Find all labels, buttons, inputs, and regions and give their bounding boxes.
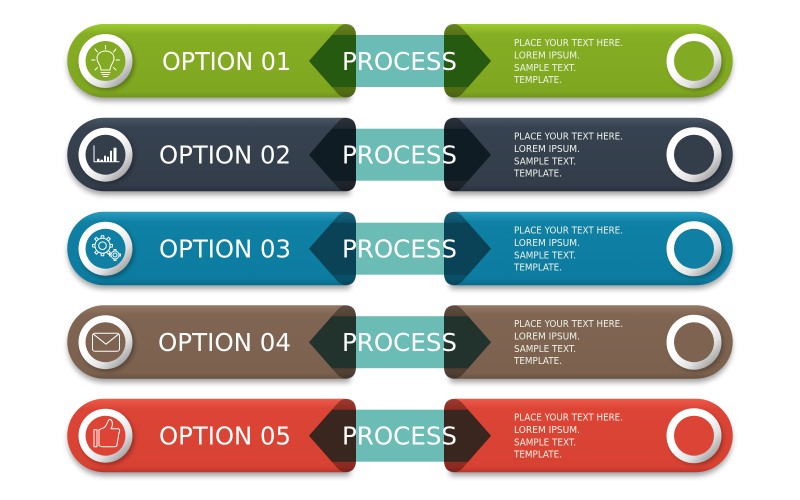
left ring	[78, 409, 134, 465]
description text	[513, 38, 623, 86]
left panel	[67, 399, 356, 472]
description text: TEMPLATE.	[513, 356, 562, 367]
option row 2	[67, 118, 733, 195]
description text: SAMPLE TEXT.	[514, 344, 576, 355]
description text: TEMPLATE.	[513, 450, 562, 461]
icon: gears	[92, 236, 120, 260]
right arrow fold	[444, 24, 491, 98]
shadow	[68, 310, 732, 382]
left arrow	[309, 129, 356, 181]
right arrow fold	[444, 118, 491, 191]
right ring	[666, 315, 723, 371]
option row 1	[67, 24, 733, 101]
process label: PROCESS	[342, 422, 457, 451]
description text: LOREM IPSUM.	[514, 238, 580, 249]
teal connector band	[356, 316, 444, 368]
left arrow	[309, 223, 356, 275]
option label: OPTION 03	[159, 235, 291, 264]
left ring	[78, 34, 134, 90]
icon: light bulb	[92, 46, 120, 76]
option row 5	[67, 399, 733, 476]
right panel	[444, 118, 733, 191]
left panel	[67, 212, 356, 285]
right arrow	[444, 410, 491, 462]
teal connector band	[356, 223, 444, 275]
description text: LOREM IPSUM.	[514, 144, 580, 155]
description text	[513, 413, 623, 461]
shadow	[68, 123, 732, 195]
description text: TEMPLATE.	[513, 263, 562, 274]
right panel	[444, 212, 733, 285]
teal connector band	[356, 410, 444, 462]
option label: OPTION 04	[158, 328, 291, 357]
icon: bar chart	[94, 146, 119, 162]
description text	[513, 132, 623, 180]
left arrow	[309, 410, 356, 462]
left arrow fold	[309, 212, 356, 285]
left ring	[78, 315, 134, 371]
process label: PROCESS	[342, 235, 457, 264]
description text: SAMPLE TEXT.	[514, 157, 576, 168]
teal connector band	[356, 35, 444, 87]
right arrow	[444, 35, 491, 87]
left arrow fold	[309, 118, 356, 191]
right panel	[444, 399, 733, 472]
option label: OPTION 01	[162, 47, 291, 76]
description text: TEMPLATE.	[513, 75, 562, 86]
description text: SAMPLE TEXT.	[514, 438, 576, 449]
left panel	[67, 305, 356, 379]
left ring	[78, 222, 134, 278]
process label: PROCESS	[342, 328, 457, 357]
description text: PLACE YOUR TEXT HERE.	[514, 226, 623, 237]
left arrow fold	[309, 305, 356, 379]
description text: LOREM IPSUM.	[514, 425, 580, 436]
option row 4	[67, 305, 733, 382]
description text: TEMPLATE.	[513, 169, 562, 180]
shadow	[68, 404, 732, 476]
description text	[513, 319, 623, 367]
description text: PLACE YOUR TEXT HERE.	[514, 413, 623, 424]
left arrow	[309, 35, 356, 87]
option label: OPTION 02	[159, 141, 291, 170]
shadow	[68, 29, 732, 101]
left arrow	[309, 316, 356, 368]
left panel	[67, 118, 356, 191]
right ring	[666, 34, 723, 90]
right arrow fold	[444, 399, 491, 472]
description text: PLACE YOUR TEXT HERE.	[514, 132, 623, 143]
right ring	[666, 221, 723, 278]
teal connector band	[356, 129, 444, 181]
left arrow fold	[309, 24, 356, 98]
process label: PROCESS	[342, 47, 457, 76]
option row 3	[67, 212, 733, 289]
left ring	[78, 128, 134, 184]
right ring	[666, 408, 723, 465]
description text: SAMPLE TEXT.	[514, 251, 576, 262]
right arrow	[444, 223, 491, 275]
right arrow	[444, 316, 491, 368]
shadow	[68, 217, 732, 289]
icon: thumbs up	[94, 420, 120, 447]
right panel	[444, 24, 733, 98]
right arrow	[444, 129, 491, 181]
description text	[513, 226, 623, 274]
process label: PROCESS	[342, 141, 457, 170]
left panel	[67, 24, 356, 98]
description text: LOREM IPSUM.	[514, 332, 580, 343]
description text: SAMPLE TEXT.	[514, 63, 576, 74]
description text: PLACE YOUR TEXT HERE.	[514, 38, 623, 49]
right arrow fold	[444, 305, 491, 379]
description text: LOREM IPSUM.	[514, 50, 580, 62]
description text: PLACE YOUR TEXT HERE.	[514, 319, 623, 330]
option label: OPTION 05	[159, 422, 291, 451]
right panel	[444, 305, 733, 379]
right arrow fold	[444, 212, 491, 285]
right ring	[666, 127, 723, 184]
icon: envelope	[92, 333, 120, 351]
left arrow fold	[309, 399, 356, 472]
